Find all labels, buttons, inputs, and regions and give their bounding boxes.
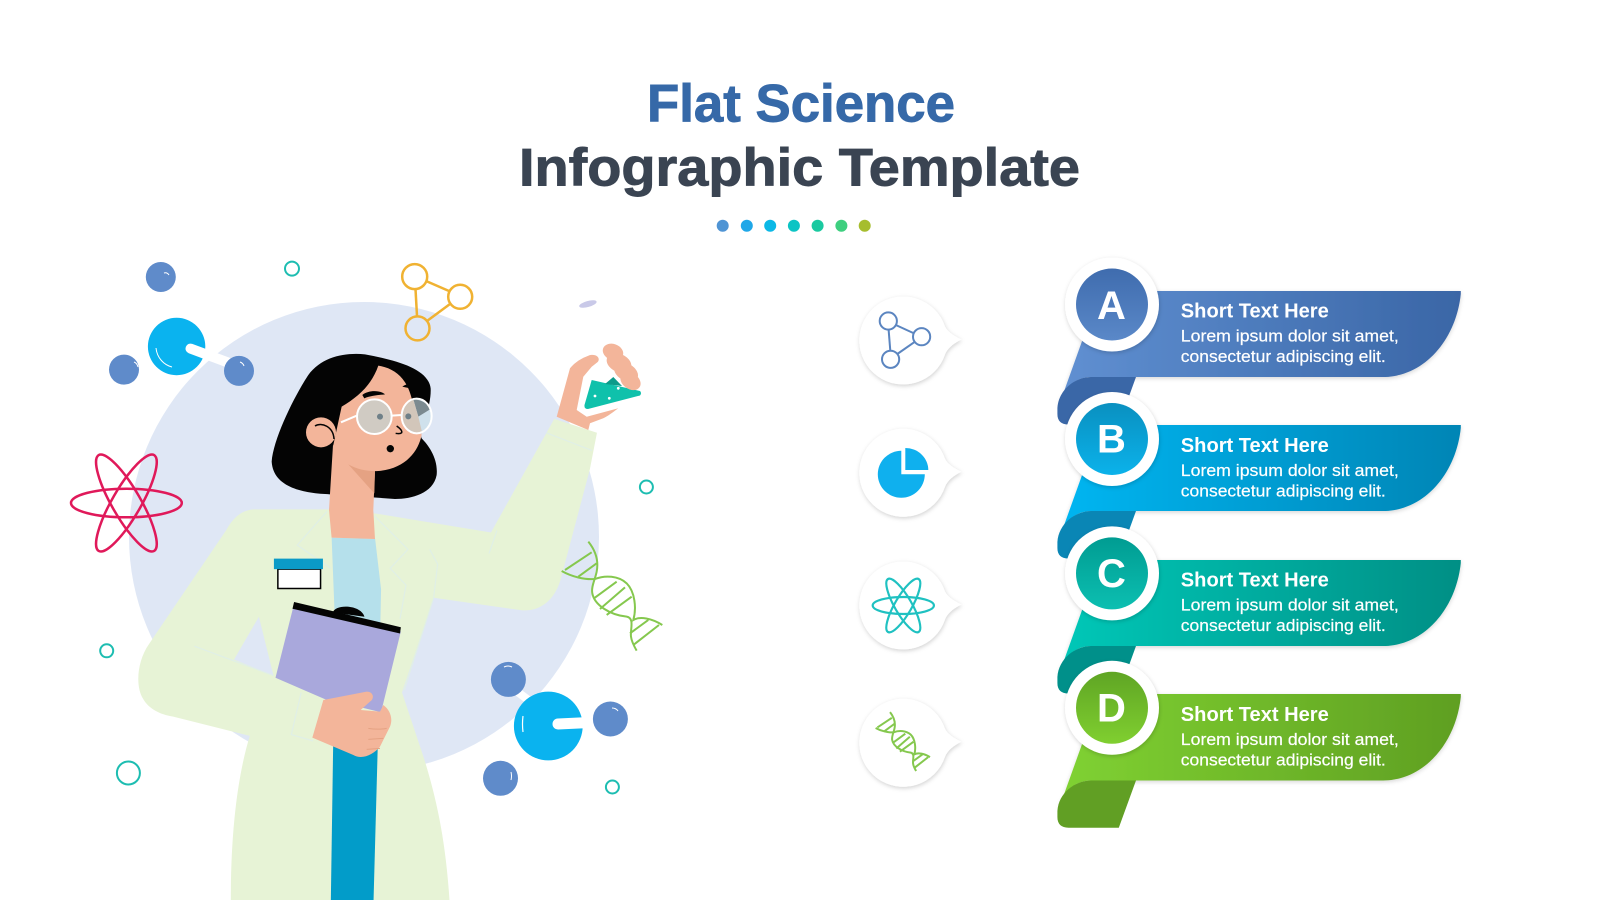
- mouth: [387, 445, 394, 452]
- ribbon D text: consectetur adipiscing elit.: [1181, 750, 1386, 769]
- head: [306, 366, 432, 493]
- icon: DNA green: [562, 542, 662, 651]
- icon bubble: molecule: [859, 296, 961, 384]
- background circle: [129, 302, 599, 772]
- ribbon A band: [1058, 291, 1461, 407]
- icon: network triangle: [880, 312, 930, 368]
- raised hand with flask: [557, 341, 644, 430]
- ribbon D text: Lorem ipsum dolor sit amet,: [1181, 730, 1399, 749]
- glasses: [341, 399, 432, 434]
- ribbon A fold: [1057, 377, 1136, 424]
- face: [333, 366, 422, 471]
- neck: [329, 445, 375, 539]
- name badge: [274, 559, 323, 589]
- ribbon B fold: [1057, 511, 1136, 558]
- neck shadow: [348, 464, 375, 493]
- ribbon A text: Lorem ipsum dolor sit amet,: [1181, 327, 1399, 346]
- scientist illustration: [138, 341, 644, 900]
- icon: DNA helix: [876, 712, 930, 771]
- ribbon D band: [1058, 694, 1461, 810]
- ribbon B text: Lorem ipsum dolor sit amet,: [1181, 461, 1399, 480]
- icon: pie: [878, 448, 928, 498]
- ribbon A: [1057, 258, 1461, 424]
- ribbon A text: Short Text Here: [1181, 300, 1329, 322]
- title: [519, 74, 1080, 198]
- ribbon B badge: B: [1097, 418, 1126, 462]
- ribbon B text: Short Text Here: [1181, 434, 1329, 457]
- hand holding clipboard: [312, 692, 391, 757]
- gap between arm and coat: [234, 617, 274, 676]
- ribbon B band: [1058, 425, 1461, 541]
- icon bubble: DNA: [859, 699, 961, 787]
- ribbon C text: Lorem ipsum dolor sit amet,: [1181, 596, 1399, 615]
- icon: yellow molecule: [402, 264, 472, 340]
- ribbon D text: [1181, 703, 1399, 769]
- ribbon A badge: [1065, 258, 1159, 352]
- title: Flat Science: [647, 74, 955, 134]
- icon: atom: [873, 575, 934, 636]
- title: Infographic Template: [519, 138, 1080, 198]
- icon: molecule top left: [109, 262, 254, 386]
- lab coat: [138, 419, 597, 900]
- icon bubble: atom: [859, 562, 961, 650]
- clipboard: [275, 602, 401, 712]
- blue dress: [331, 741, 378, 900]
- ribbon C band: [1058, 560, 1461, 676]
- ribbon A badge: A: [1097, 284, 1126, 328]
- ribbon C badge: [1065, 526, 1159, 620]
- ribbon C: [1057, 526, 1461, 694]
- shirt: [332, 538, 381, 627]
- ribbon C badge: C: [1097, 552, 1126, 596]
- ribbon A text: [1181, 300, 1399, 366]
- ribbon B text: consectetur adipiscing elit.: [1181, 481, 1386, 500]
- hair: [272, 354, 437, 499]
- icon: decorative rings: [100, 262, 653, 794]
- ribbon B: [1057, 392, 1461, 558]
- ribbon D badge: D: [1097, 686, 1126, 730]
- ribbon C text: Short Text Here: [1181, 568, 1329, 592]
- ribbon D text: Short Text Here: [1181, 703, 1329, 726]
- icon: lilac speck: [578, 299, 597, 309]
- ribbon C text: [1181, 568, 1399, 635]
- nose: [396, 426, 402, 434]
- icon: red atom: [71, 448, 182, 558]
- icon: molecule bottom right: [483, 662, 628, 796]
- icon bubble: pie chart: [859, 429, 961, 517]
- ribbon B text: [1181, 434, 1399, 500]
- ribbon B badge: [1065, 392, 1159, 486]
- ribbon D fold: [1057, 780, 1136, 828]
- ribbon D: [1057, 661, 1461, 828]
- ribbon D badge: [1065, 661, 1159, 755]
- ear: [306, 417, 336, 447]
- ribbon C text: consectetur adipiscing elit.: [1181, 616, 1386, 635]
- eyebrows: [362, 384, 417, 398]
- ribbon C fold: [1057, 646, 1136, 694]
- coat seam lines: [194, 433, 592, 741]
- ribbon A text: consectetur adipiscing elit.: [1181, 347, 1386, 366]
- title dots: [717, 220, 871, 232]
